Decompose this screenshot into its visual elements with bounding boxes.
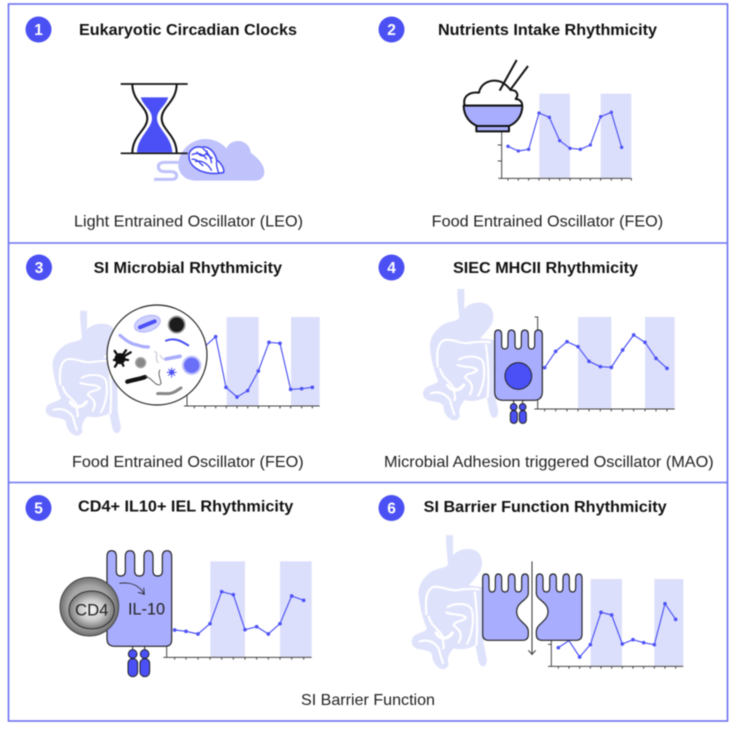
line chart 2: [498, 94, 631, 181]
panel 2: nutrients intake rhythmicity: [369, 4, 727, 243]
number badge 5: 5: [34, 500, 43, 518]
number badge 1: 1: [34, 22, 43, 39]
heading 5: CD4+ IL10+ IEL Rhythmicity: [78, 499, 293, 516]
caption 4: Microbial Adhesion triggered Oscillator (MAO): [384, 454, 714, 471]
heading 1: Eukaryotic Circadian Clocks: [79, 22, 297, 39]
icon: separated epithelial cells with passage arrow: [483, 561, 582, 654]
number badge 3: 3: [35, 260, 44, 277]
line chart 6: [548, 579, 683, 669]
heading 6: SI Barrier Function Rhythmicity: [424, 499, 667, 516]
line chart 5: [163, 561, 312, 660]
icon: intestine silhouette: [423, 289, 498, 420]
icon: rice bowl with chopsticks: [464, 60, 528, 131]
number badge 6: 6: [387, 500, 396, 518]
caption 2: Food Entrained Oscillator (FEO): [432, 214, 663, 231]
caption 1: Light Entrained Oscillator (LEO): [74, 214, 303, 231]
number badge 3: [26, 254, 52, 280]
caption 5 and 6: SI Barrier Function: [301, 692, 435, 709]
icon: epithelial cell with IL-10: IL-10: [128, 599, 165, 618]
icon: CD4 T cell: [60, 577, 119, 636]
number badge 5: [26, 495, 52, 521]
panel 4: SIEC MHCII rhythmicity: [369, 243, 727, 482]
line chart 3: [184, 317, 320, 408]
number badge 1: [26, 16, 52, 42]
heading 4: SIEC MHCII Rhythmicity: [453, 260, 638, 277]
number badge 2: [378, 16, 404, 42]
icon: intestine silhouette: [46, 311, 121, 436]
panel 1: eukaryotic circadian clocks: [9, 4, 369, 243]
number badge 2: 2: [387, 22, 396, 39]
icon: epithelial cell with MHCII: [495, 330, 542, 423]
panel 5: CD4+ IL10+ IEL rhythmicity: [9, 482, 435, 721]
panel 6: SI barrier function rhythmicity: [369, 482, 727, 721]
icon: CD4 T cell: CD4: [75, 601, 108, 620]
number badge 6: [378, 495, 404, 521]
icon: hourglass: [121, 84, 188, 153]
number badge 4: 4: [387, 260, 396, 277]
icon: microbes magnified circle: [107, 305, 207, 405]
icon: epithelial cell with IL-10: [107, 551, 172, 677]
panel 3: SI microbial rhythmicity: [9, 243, 369, 482]
caption 3: Food Entrained Oscillator (FEO): [72, 454, 304, 471]
icon: intestine silhouette: [412, 535, 487, 669]
icon: mouse with brain: [154, 139, 264, 181]
line chart 4: [534, 317, 675, 411]
number badge 4: [378, 254, 404, 280]
heading 2: Nutrients Intake Rhythmicity: [438, 22, 657, 39]
heading 3: SI Microbial Rhythmicity: [94, 260, 282, 277]
